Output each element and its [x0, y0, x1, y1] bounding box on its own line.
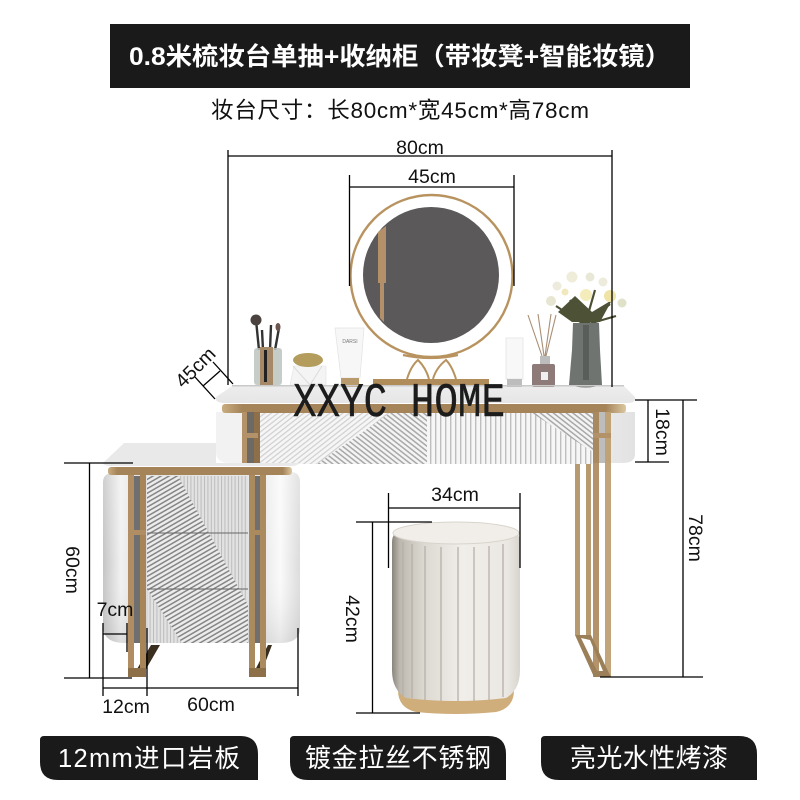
title banner — [110, 24, 690, 88]
dimension: table width 80cm: 80cm — [396, 137, 444, 159]
dimension: leg offset 7cm — [97, 599, 133, 696]
cabinet marble top — [103, 443, 299, 466]
dimension: table depth 45cm: 45cm — [171, 343, 220, 392]
gold frame band — [222, 404, 626, 413]
left table leg — [242, 412, 260, 463]
dimension: leg offset 7cm: 7cm — [97, 599, 133, 621]
stool pleated body — [392, 530, 520, 701]
dimension: stool width 34cm — [388, 484, 520, 568]
feature tag: imported slate — [40, 736, 258, 780]
stool gold base — [398, 690, 514, 714]
dimension: stool height 42cm — [341, 522, 432, 713]
dimension: cabinet base 12cm and 60cm: 60cm — [187, 694, 235, 716]
dimension: drawer height 18cm — [635, 400, 697, 462]
cabinet right leg — [249, 475, 266, 677]
dimension: mirror width 45cm — [350, 166, 514, 286]
stool — [392, 522, 520, 714]
mirror — [350, 195, 512, 387]
dimension: stool width 34cm: 34cm — [431, 484, 479, 506]
drawer front with striped pattern — [260, 413, 593, 464]
title banner: 0.8米梳妆台单抽+收纳柜（带妆凳+智能妆镜） — [129, 42, 671, 71]
table legs — [575, 413, 611, 677]
table surface shadow line — [232, 385, 624, 386]
watermark: XXYC HOME — [293, 377, 505, 431]
table wings — [216, 412, 635, 463]
cabinet body — [103, 472, 300, 643]
dimension: drawer height 18cm: 18cm — [651, 408, 673, 456]
feature tag: gold brushed stainless steel: 镀金拉丝不锈钢 — [305, 743, 491, 773]
cream tube — [335, 328, 364, 387]
dimension: cabinet base 12cm and 60cm: 12cm — [102, 696, 150, 718]
cabinet gold band — [108, 467, 292, 475]
marble top — [216, 386, 635, 403]
feature tag: gold brushed stainless steel — [290, 736, 506, 780]
stool cushion — [393, 522, 519, 544]
vase with flowers — [546, 272, 626, 388]
dimension: cabinet height 60cm — [61, 463, 133, 678]
feature tag: imported slate: 12mm进口岩板 — [58, 745, 240, 773]
cabinet rear feet — [133, 645, 272, 676]
dimension: table height 78cm — [600, 400, 706, 677]
right table leg — [593, 412, 611, 463]
subtitle: overall dimensions: 妆台尺寸：长80cm*宽45cm*高78cm — [211, 98, 589, 123]
dressing table body — [216, 386, 635, 464]
dimension: table height 78cm: 78cm — [684, 514, 706, 562]
potted plant — [290, 353, 326, 385]
dimension: stool height 42cm: 42cm — [341, 595, 363, 643]
cabinet drawers — [147, 476, 248, 643]
feature tag: gloss water-based paint: 亮光水性烤漆 — [570, 743, 728, 773]
cabinet inner shadows — [134, 476, 260, 643]
small cosmetic tube — [506, 338, 523, 387]
dimension: cabinet height 60cm: 60cm — [61, 546, 83, 594]
dimension: mirror width 45cm: 45cm — [408, 166, 456, 188]
feature tag: gloss water-based paint — [541, 736, 757, 780]
cream tube: DARSI — [342, 339, 358, 345]
dimension: table width 80cm — [228, 137, 612, 387]
makeup brushes in glass holder — [250, 314, 282, 385]
storage cabinet — [103, 443, 300, 677]
reed diffuser — [528, 314, 556, 387]
dimension: cabinet base 12cm and 60cm — [102, 628, 298, 718]
cabinet left leg — [128, 475, 146, 677]
